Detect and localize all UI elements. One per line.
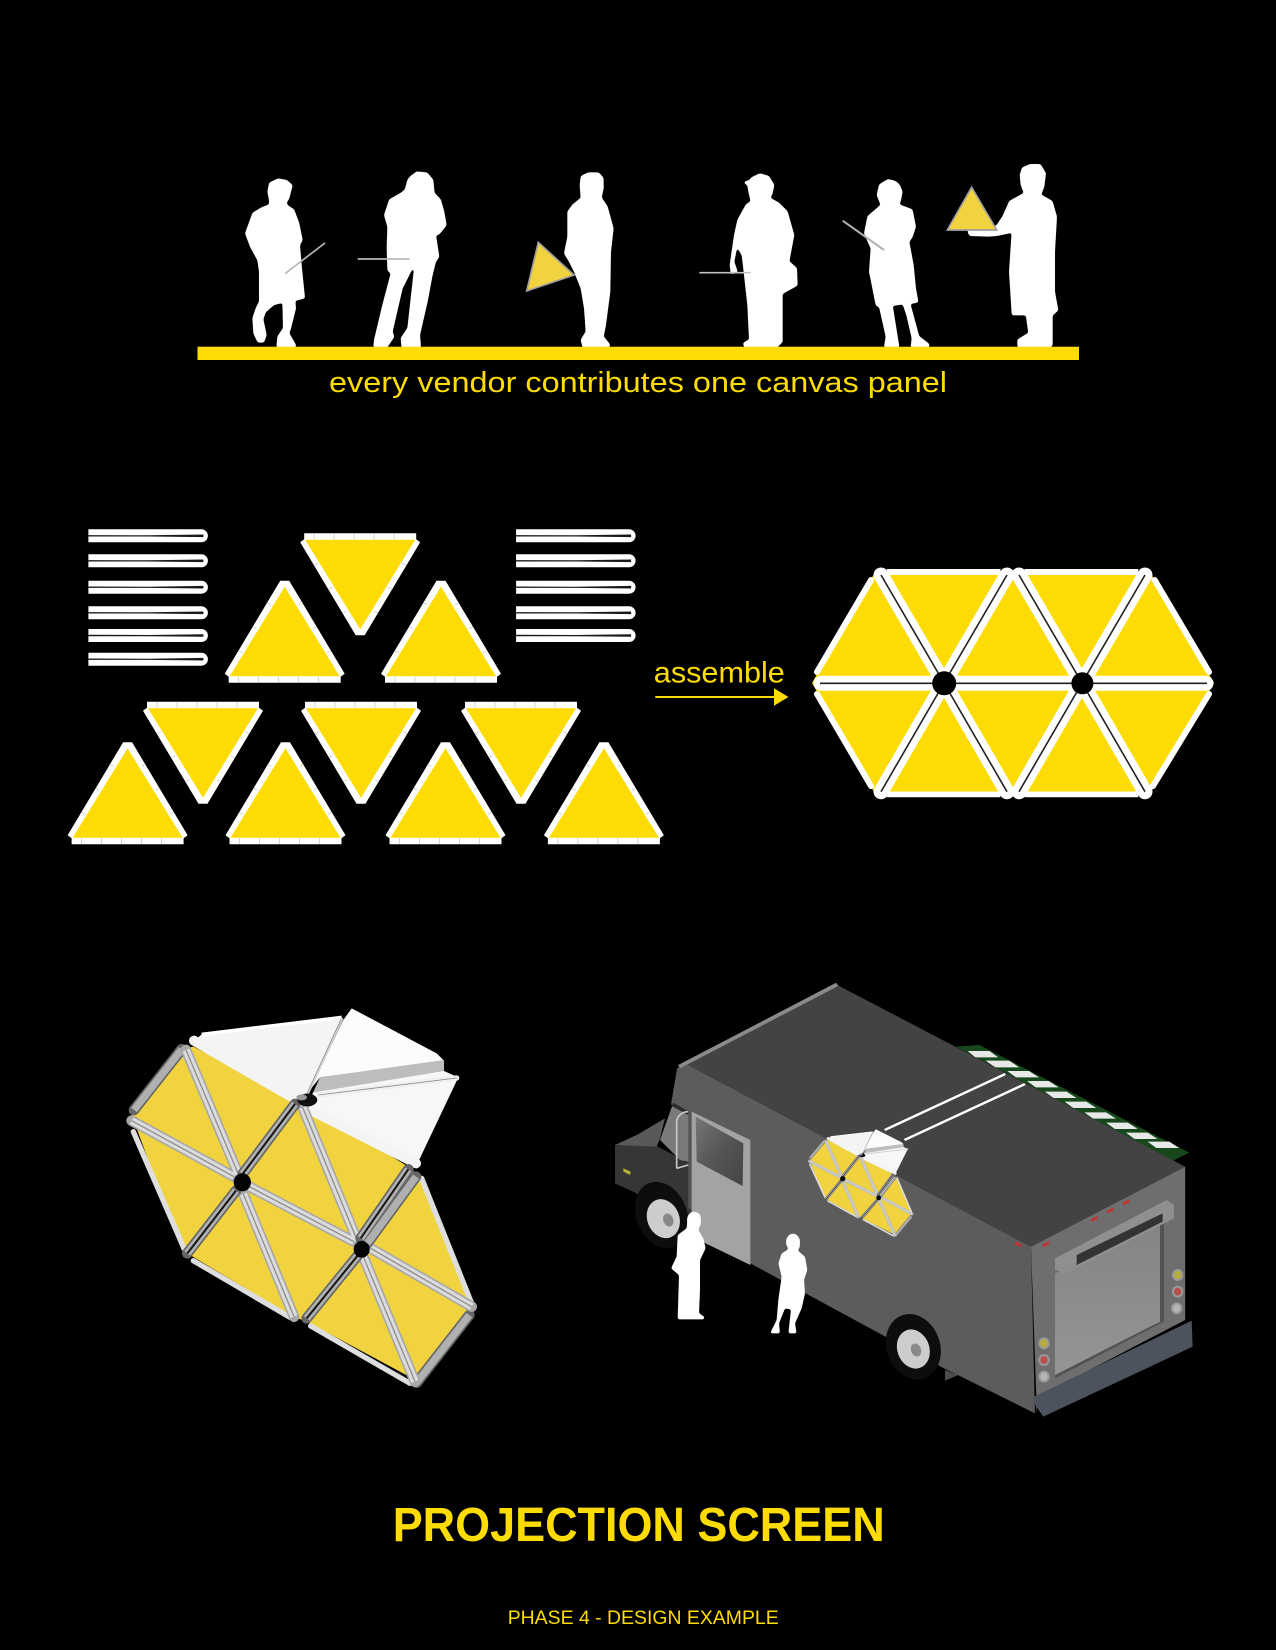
ground bar: [198, 347, 1079, 360]
vendors 3 and 4: [527, 172, 797, 347]
rear door: [1055, 1223, 1164, 1378]
awning: [956, 1045, 1189, 1161]
subtitle: PHASE 4 - DESIGN EXAMPLE: [508, 1607, 779, 1629]
vendor 2 silhouette: [374, 172, 446, 347]
cab: [615, 1103, 692, 1247]
3D view of folded projection screen: [132, 1008, 472, 1383]
truck side wall: [671, 1063, 1035, 1413]
title: PROJECTION SCREEN: [393, 1499, 885, 1552]
vendor 3 silhouette: [565, 172, 613, 347]
wire bundle left: [88, 529, 208, 666]
vendor 5 silhouette: [865, 180, 928, 347]
vendor 1 silhouette: [246, 179, 304, 347]
truck front and door: [615, 1103, 807, 1333]
section: panel kit of parts: [68, 529, 664, 844]
small projection screen on truck: [809, 1129, 912, 1236]
front wheel: [625, 1174, 698, 1256]
projection screen support rods: [885, 1074, 1025, 1140]
truck rear face: [1031, 1167, 1185, 1413]
side door: [692, 1112, 750, 1265]
section: vendors with panels: [198, 165, 1079, 399]
caption: vendors: every vendor contributes one canvas panel: [329, 367, 947, 399]
roof rail: [679, 984, 837, 1067]
rear bumper: [1034, 1321, 1193, 1417]
yellow triangle panels: [68, 533, 664, 844]
vendor 1 pole: [285, 243, 325, 274]
person by door: [671, 1212, 706, 1319]
assemble label: assemble: [654, 657, 785, 690]
assembled hexagon screen: [812, 569, 1214, 797]
arrow: assemble: [655, 688, 788, 706]
vendor 5 pole: [843, 221, 884, 250]
vendor 3 panel: [527, 242, 574, 291]
vendors 1 and 2: [246, 172, 446, 347]
vendor 4 pole: [699, 270, 751, 275]
person by side wall: [770, 1234, 807, 1333]
vendor 6 panel: [947, 187, 997, 230]
roof marker lights: [1015, 1199, 1130, 1247]
vendor 2 pole: [358, 256, 410, 261]
door strip: [688, 1110, 692, 1210]
vendor 6 silhouette: [968, 165, 1057, 347]
truck roof: [685, 985, 1185, 1247]
vendors 5 and 6: [843, 165, 1057, 347]
rear lights: [1039, 1270, 1182, 1382]
rear wheel: [877, 1306, 950, 1387]
door header: [1055, 1200, 1174, 1273]
truck rear: [877, 1199, 1193, 1417]
vendor 4 silhouette: [731, 174, 797, 347]
mud flap: [945, 1370, 958, 1381]
truck scene: [615, 984, 1193, 1417]
wire bundle right: [516, 529, 636, 642]
truck body: [671, 984, 1189, 1413]
